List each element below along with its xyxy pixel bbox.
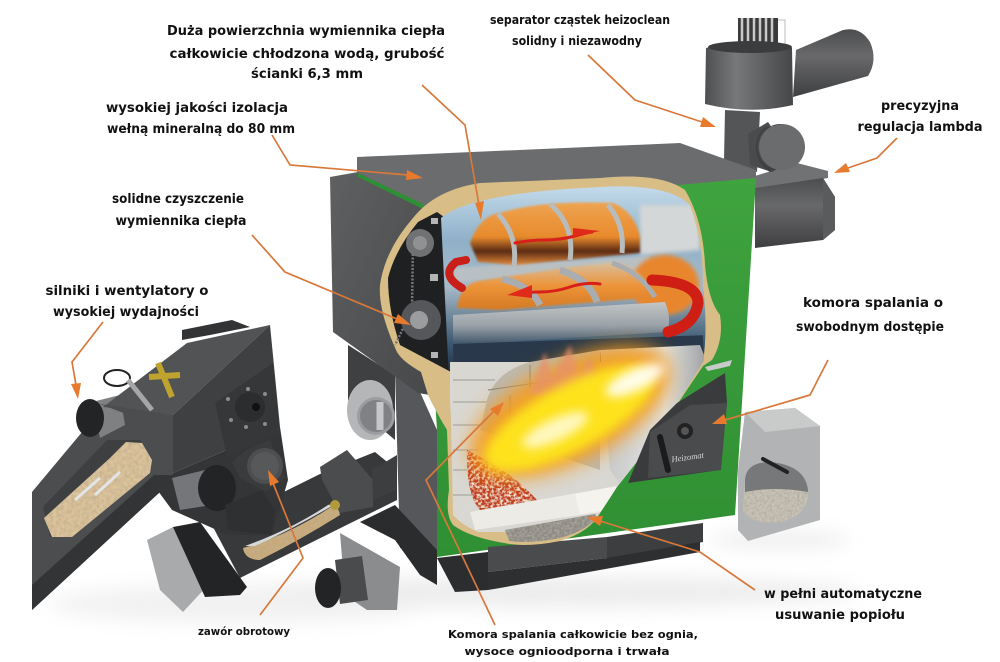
drive motor under gearbox [172,465,236,511]
orange gas passage right [631,255,699,315]
arrow: separator [588,55,716,127]
right lambda housing [755,163,835,248]
bottom drive motor [315,533,400,610]
lower heat exchanger tube [457,262,657,310]
insulation outline [380,176,721,545]
steel right wall [600,345,708,490]
firebox floor [470,486,617,530]
label: motors: silniki i wentylatory o [46,284,209,299]
hopper gearbox [100,320,280,475]
label: motors line 2: wysokiej wydajności [53,305,199,320]
label: heat exchanger: Duża powierzchnia wymiennika ciepła [167,24,445,39]
cutaway interior [440,185,710,543]
label: ash removal line 2: usuwanie popiołu [775,608,905,623]
label: cleaning: solidne czyszczenie [112,192,244,207]
pale pipe right [640,205,700,255]
silver motor lower left [147,522,247,612]
boiler top cover [357,143,756,209]
combustion chamber bricks [450,350,710,532]
arrow: insulation [272,135,423,180]
pale band between tubes [453,256,650,282]
ash box [738,408,820,541]
floor shadow [50,530,860,624]
burner door: Heizomat [670,450,705,464]
label: ash removal: w pełni automatyczne [764,587,922,602]
label: chamber: Komora spalania całkowicie bez ognia, [448,629,698,641]
flame [456,332,684,493]
arrow: door [712,360,828,424]
label: rotary valve: zawór obrotowy [198,626,290,638]
label: separator line 2: solidny i niezawodny [512,34,642,48]
label: lambda line 2: regulacja lambda [858,120,982,135]
fuel conveyor to boiler [213,450,397,578]
separator with chimney and pipe [705,18,874,172]
chute window [43,440,152,537]
arrow: cleaning [252,235,411,325]
arrow: heat exchanger [422,85,484,220]
burner door [628,360,732,483]
label: heat exchanger line 2: całkowicie chłodzona wodą, grubość [170,47,445,62]
ring handle and brass fitting [104,363,180,410]
ash pit [505,514,600,543]
water jacket [440,185,710,370]
arrow: ash removal [587,516,755,590]
bottom base and ash drawer [437,523,703,592]
arrow: motors [71,322,103,399]
drive motor upper left [76,395,125,438]
label: insulation: wysokiej jakości izolacja [106,101,288,116]
label: door line 2: swobodnym dostępie [796,320,944,335]
boiler side wall [330,172,437,558]
arrow: lambda [834,138,897,173]
label: cleaning line 2: wymiennika ciepła [116,214,246,229]
label: separator: separator cząstek heizoclean [490,13,670,27]
gearbox lower body [150,427,288,535]
label: door: komora spalania o [803,296,943,311]
red gas flow arrows [449,228,698,332]
chain drive panel [388,212,451,372]
upper heat exchanger tube [470,202,640,266]
arrow: rotary valve [260,470,303,615]
lower grey tube [453,302,669,345]
label: lambda: precyzyjna [881,99,959,114]
label: heat exchanger line 3: ścianki 6,3 mm [251,67,363,82]
label: insulation line 2: wełną mineralną do 80 mm [107,122,295,137]
burning pellets [467,450,537,510]
frame under conveyor [360,505,437,585]
label: chamber line 2: wysoce ognioodporna i trwała [464,646,670,658]
rotary valve [225,440,285,535]
feed chute [32,407,173,610]
green boiler front [423,178,756,557]
arrow: combustion chamber [426,402,504,625]
wood chips [44,442,152,537]
fan on boiler side [347,380,395,440]
